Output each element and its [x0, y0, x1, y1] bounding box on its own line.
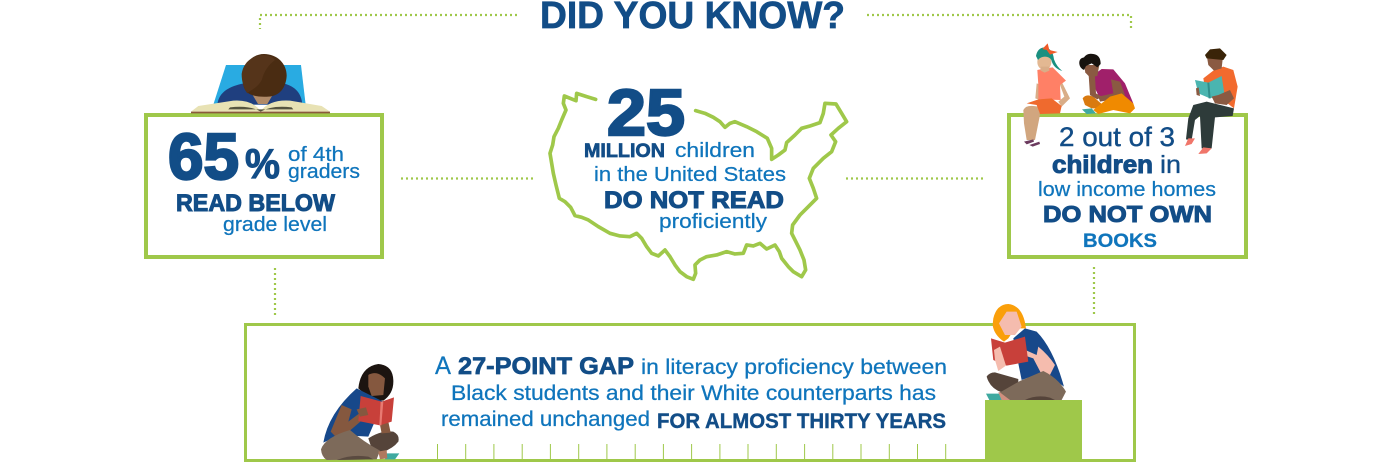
dotted connector: left box to bottom panel: [274, 268, 276, 317]
icon: child with head down on open book: [191, 54, 330, 113]
text: A 27-point gap in literacy proficiency between: [435, 352, 947, 380]
text: of 4th graders: graders: [288, 161, 360, 183]
panel: 27-point gap: [246, 324, 1134, 462]
illustration: boy reading teal book sitting on box: [1185, 48, 1238, 154]
text: remained unchanged for almost thirty years: FOR ALMOST THIRTY YEARS: [657, 410, 946, 433]
tick marks ruler: [438, 444, 946, 459]
text: A 27-point gap in literacy proficiency between: in literacy proficiency between: [641, 356, 947, 379]
statistic: 65%: %: [245, 140, 280, 187]
text: Black students and their White counterparts has: Black students and their White counterparts has: [451, 382, 936, 405]
dotted connector: map to right box: [846, 177, 986, 180]
text: A 27-point gap in literacy proficiency between: 27-POINT GAP: [458, 353, 634, 380]
text: of 4th graders: [288, 144, 360, 183]
statistic: 25: 25: [607, 76, 685, 149]
text: in the United States: in the United States: [594, 164, 786, 186]
statistic: 65%: [168, 120, 280, 193]
text: grade level: grade level: [223, 214, 327, 236]
map of the United States: [550, 76, 847, 279]
text: children in: children: [1052, 151, 1153, 179]
text: read below: READ BELOW: [176, 190, 335, 217]
text: remained unchanged for almost thirty years: [441, 408, 946, 433]
text: of 4th graders: of 4th: [288, 144, 344, 166]
illustration: girl with dark hair reading red book: [321, 364, 399, 460]
dotted connector: right box to bottom panel: [1093, 267, 1095, 316]
text: children in: in: [1160, 151, 1181, 179]
illustration: girl with orange hair reading red book on block: [986, 304, 1066, 400]
text: proficiently: proficiently: [659, 211, 767, 233]
text: books: BOOKS: [1083, 231, 1157, 252]
text: million children: [584, 140, 755, 162]
dotted connector: top right bracket: [867, 15, 1131, 29]
text: 2 out of 3: 2 out of 3: [1059, 122, 1175, 152]
text: A 27-point gap in literacy proficiency between: A: [435, 352, 451, 380]
dotted connector: top left bracket: [260, 15, 517, 29]
panel: 2 out of 3: [1009, 115, 1246, 257]
illustration: child with curly hair resting chin on hand: [1079, 54, 1135, 114]
statistic: 65%: 65: [168, 120, 239, 193]
panel: 65 percent: [146, 115, 382, 257]
text: do not read: DO NOT READ: [604, 187, 784, 214]
map outline: [550, 93, 847, 279]
text: million children: children: [675, 140, 755, 162]
illustration: girl with teal hair sitting on box: [1023, 43, 1070, 147]
green block: [985, 400, 1082, 462]
text: million children: MILLION: [584, 141, 665, 162]
text: do not own: DO NOT OWN: [1043, 201, 1212, 227]
text: low income homes: low income homes: [1038, 179, 1216, 201]
dotted connector: left box to map: [401, 177, 535, 180]
text: remained unchanged for almost thirty years: remained unchanged: [441, 408, 650, 431]
